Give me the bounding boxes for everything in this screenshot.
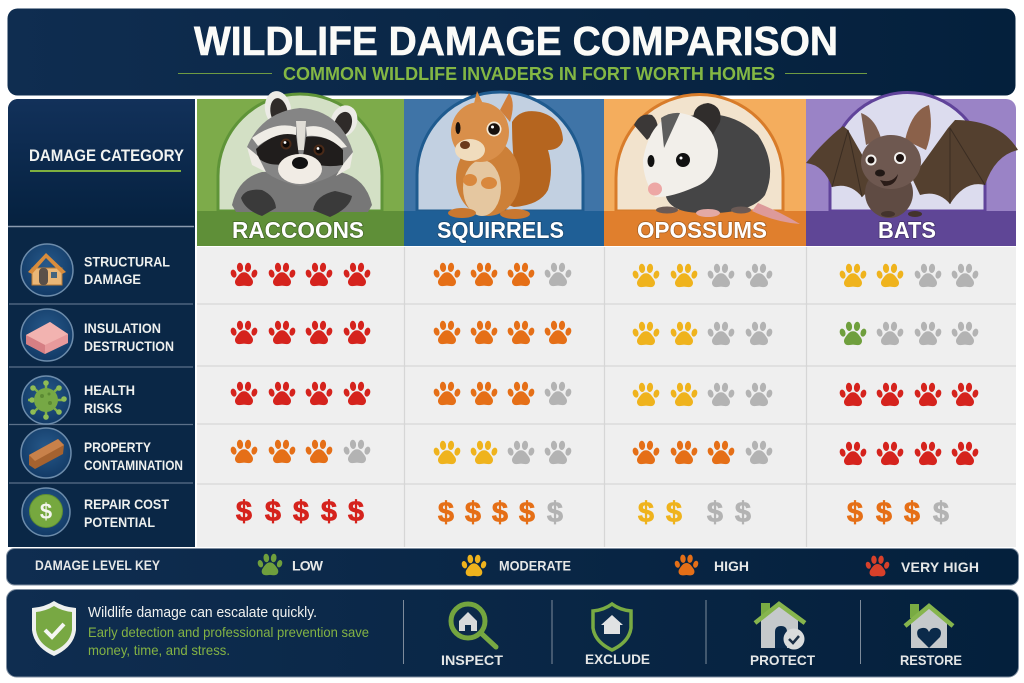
ratings: repair cost potential: $ (876, 497, 892, 529)
ratings: structural damage (230, 262, 979, 287)
text: warning message (88, 605, 369, 658)
legend: damage level key (6, 548, 1018, 585)
row label: repair cost potential (84, 496, 169, 530)
legend item: very high (865, 555, 979, 576)
illustration: bat (806, 105, 1018, 218)
legend item: high: HIGH (714, 558, 749, 574)
icon: property contamination wood (21, 428, 71, 478)
panel: call to action (6, 590, 1018, 677)
row label: insulation destruction (84, 320, 174, 354)
row label: insulation destruction: INSULATION (84, 320, 161, 336)
legend item: low (257, 553, 324, 575)
illustration: squirrel (448, 91, 563, 219)
icon: health risk virus (22, 376, 70, 424)
icon: restore (905, 604, 953, 648)
icon: insulation block (21, 309, 73, 361)
ratings: repair cost potential: $ (904, 497, 920, 529)
ratings: repair cost potential: $ (321, 496, 337, 528)
subtitle: COMMON WILDLIFE INVADERS IN FORT WORTH HOMES (283, 64, 775, 84)
ratings: repair cost potential: $ (348, 496, 364, 528)
ratings: repair cost potential: $ (666, 497, 682, 529)
legend item: moderate: MODERATE (499, 558, 571, 574)
text: warning message: Wildlife damage can escalate quickly. (88, 605, 317, 621)
panel: rating table (197, 247, 1016, 547)
ratings: repair cost potential: $ (933, 497, 949, 529)
column heading: opossums: OPOSSUMS (637, 217, 767, 243)
ratings: repair cost potential: $ (438, 497, 454, 529)
legend item: low: LOW (292, 558, 324, 574)
row label: repair cost potential: POTENTIAL (84, 514, 155, 530)
row label: repair cost potential: REPAIR COST (84, 496, 169, 512)
panel: opossums header (604, 94, 806, 246)
label: restore: RESTORE (900, 652, 962, 668)
ratings: repair cost potential: $ (492, 497, 508, 529)
ratings: repair cost potential: $ (847, 497, 863, 529)
text: warning message: money, time, and stress. (88, 642, 230, 658)
illustration: raccoon (232, 89, 372, 217)
legend: damage level key: DAMAGE LEVEL KEY (35, 557, 161, 573)
ratings: repair cost potential: $ (638, 497, 654, 529)
panel: raccoons header (197, 89, 404, 246)
title banner (8, 8, 1016, 96)
row label: structural damage: DAMAGE (84, 271, 141, 287)
ratings: repair cost potential: $ (707, 497, 723, 529)
column heading: bats: BATS (878, 217, 936, 243)
ratings: insulation destruction (230, 320, 979, 345)
legend item: moderate (461, 554, 571, 576)
row label: health risks (84, 382, 135, 416)
ratings: health risks (230, 381, 979, 406)
icon: shield with check (32, 601, 76, 656)
ratings: repair cost potential: $ (293, 496, 309, 528)
ratings: repair cost potential: $ (547, 497, 563, 529)
row label: insulation destruction: DESTRUCTION (84, 338, 174, 354)
row label: health risks: HEALTH (84, 382, 135, 398)
text: warning message: Early detection and professional prevention save (88, 624, 369, 640)
ratings: repair cost potential: $ (265, 496, 281, 528)
label: protect: PROTECT (750, 652, 815, 668)
title: WILDLIFE DAMAGE COMPARISON (194, 18, 838, 64)
icon: repair cost coin: $ (40, 499, 52, 524)
column heading: raccoons: RACCOONS (232, 217, 364, 243)
ratings: property contamination (230, 439, 979, 465)
label: exclude: EXCLUDE (585, 651, 650, 667)
heading: damage category: DAMAGE CATEGORY (29, 146, 185, 165)
panel: category sidebar (8, 99, 195, 547)
icon: inspect (451, 604, 496, 647)
icon: structural damage house (21, 244, 73, 296)
ratings: repair cost potential: $ (519, 497, 535, 529)
illustration: opossum (634, 103, 800, 224)
icon: exclude (593, 604, 631, 650)
ratings: repair cost potential (236, 496, 949, 529)
row label: property contamination: CONTAMINATION (84, 457, 183, 473)
icon: repair cost coin (22, 488, 70, 536)
row label: health risks: RISKS (84, 400, 122, 416)
panel: squirrels header (404, 91, 604, 246)
icon: protect (755, 603, 805, 650)
legend item: very high: VERY HIGH (901, 559, 979, 575)
row label: property contamination (84, 439, 183, 473)
panel: bats header (806, 92, 1018, 246)
ratings: repair cost potential: $ (236, 496, 252, 528)
label: inspect: INSPECT (441, 652, 503, 668)
legend item: high (674, 554, 749, 575)
column heading: squirrels: SQUIRRELS (437, 217, 564, 243)
row label: structural damage (84, 254, 170, 287)
ratings: repair cost potential: $ (735, 497, 751, 529)
row label: property contamination: PROPERTY (84, 439, 152, 455)
row label: structural damage: STRUCTURAL (84, 254, 170, 270)
ratings: repair cost potential: $ (465, 497, 481, 529)
